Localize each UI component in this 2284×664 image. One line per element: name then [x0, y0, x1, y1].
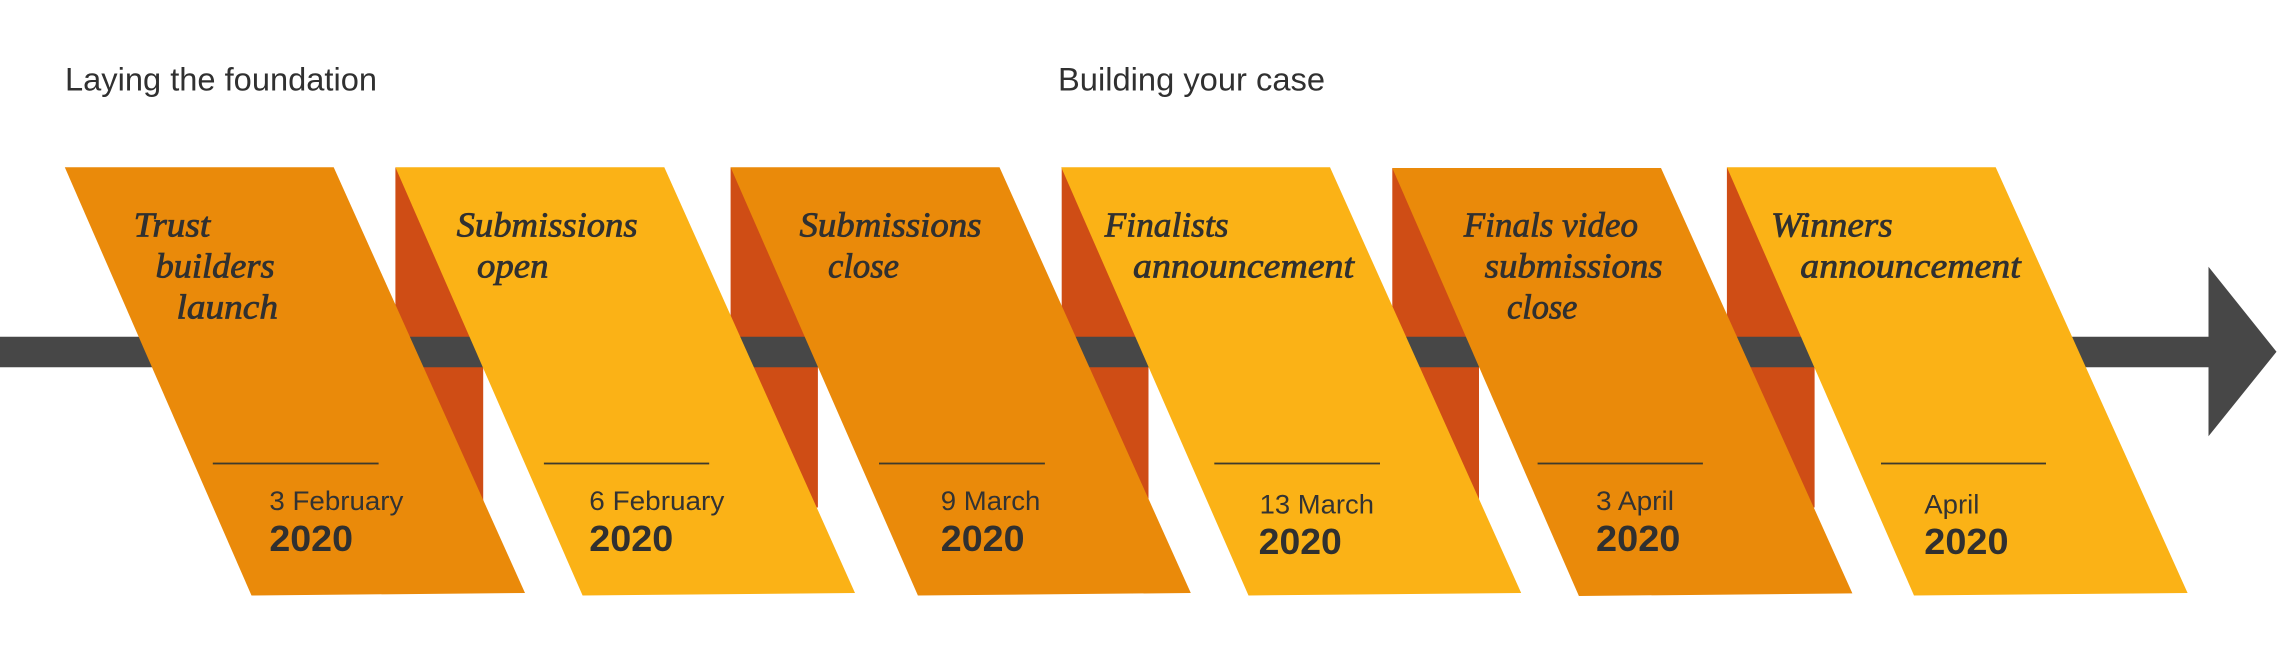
arrow: timeline — [0, 267, 2276, 436]
panel: finals video submissions close: Finals video — [1463, 206, 1638, 244]
panel: finalists announcement: Finalists — [1104, 206, 1229, 244]
panel: winners announcement: Winners — [1771, 206, 1893, 244]
panel: submissions close: 2020 — [941, 518, 1024, 559]
panel: trust builders launch: Trust — [134, 206, 212, 244]
panel: submissions open: 2020 — [589, 518, 673, 559]
panel: submissions close — [731, 167, 1191, 596]
panel: finalists announcement: announcement — [1133, 246, 1355, 286]
panel: trust builders launch — [65, 167, 525, 596]
panel: finals video submissions close: 2020 — [1596, 518, 1680, 559]
panel: submissions close: Submissions — [800, 206, 982, 244]
panel: winners announcement: announcement — [1800, 246, 2022, 286]
panel: submissions open: open — [477, 246, 548, 286]
panel: finals video submissions close: close — [1507, 288, 1577, 326]
panel: winners announcement — [1727, 167, 2188, 596]
panel: winners announcement: 2020 — [1924, 521, 2008, 562]
panel: finalists announcement — [1061, 167, 1521, 596]
panel: submissions close: 9 March — [941, 486, 1040, 516]
panel: submissions open: 6 February — [589, 486, 725, 516]
panel: trust builders launch: 2020 — [269, 518, 353, 559]
panel: submissions open — [395, 167, 855, 596]
panel: finalists announcement: 2020 — [1259, 521, 1342, 562]
panel: trust builders launch: 3 February — [269, 486, 404, 516]
heading: building your case: Building your case — [1058, 62, 1325, 98]
panel: finals video submissions close: 3 April — [1596, 486, 1674, 516]
panel: winners announcement: April — [1924, 489, 1979, 519]
fold connectors behind panels — [395, 168, 1815, 508]
panel: finals video submissions close: submissions — [1485, 246, 1663, 286]
panel: finals video submissions close — [1392, 168, 1852, 596]
heading: laying the foundation: Laying the foundation — [65, 62, 377, 98]
panel: trust builders launch: launch — [176, 288, 278, 326]
panel: trust builders launch: builders — [156, 246, 275, 286]
panel: submissions close: close — [828, 246, 899, 286]
panel: finalists announcement: 13 March — [1260, 489, 1374, 519]
panel: submissions open: Submissions — [457, 206, 638, 244]
